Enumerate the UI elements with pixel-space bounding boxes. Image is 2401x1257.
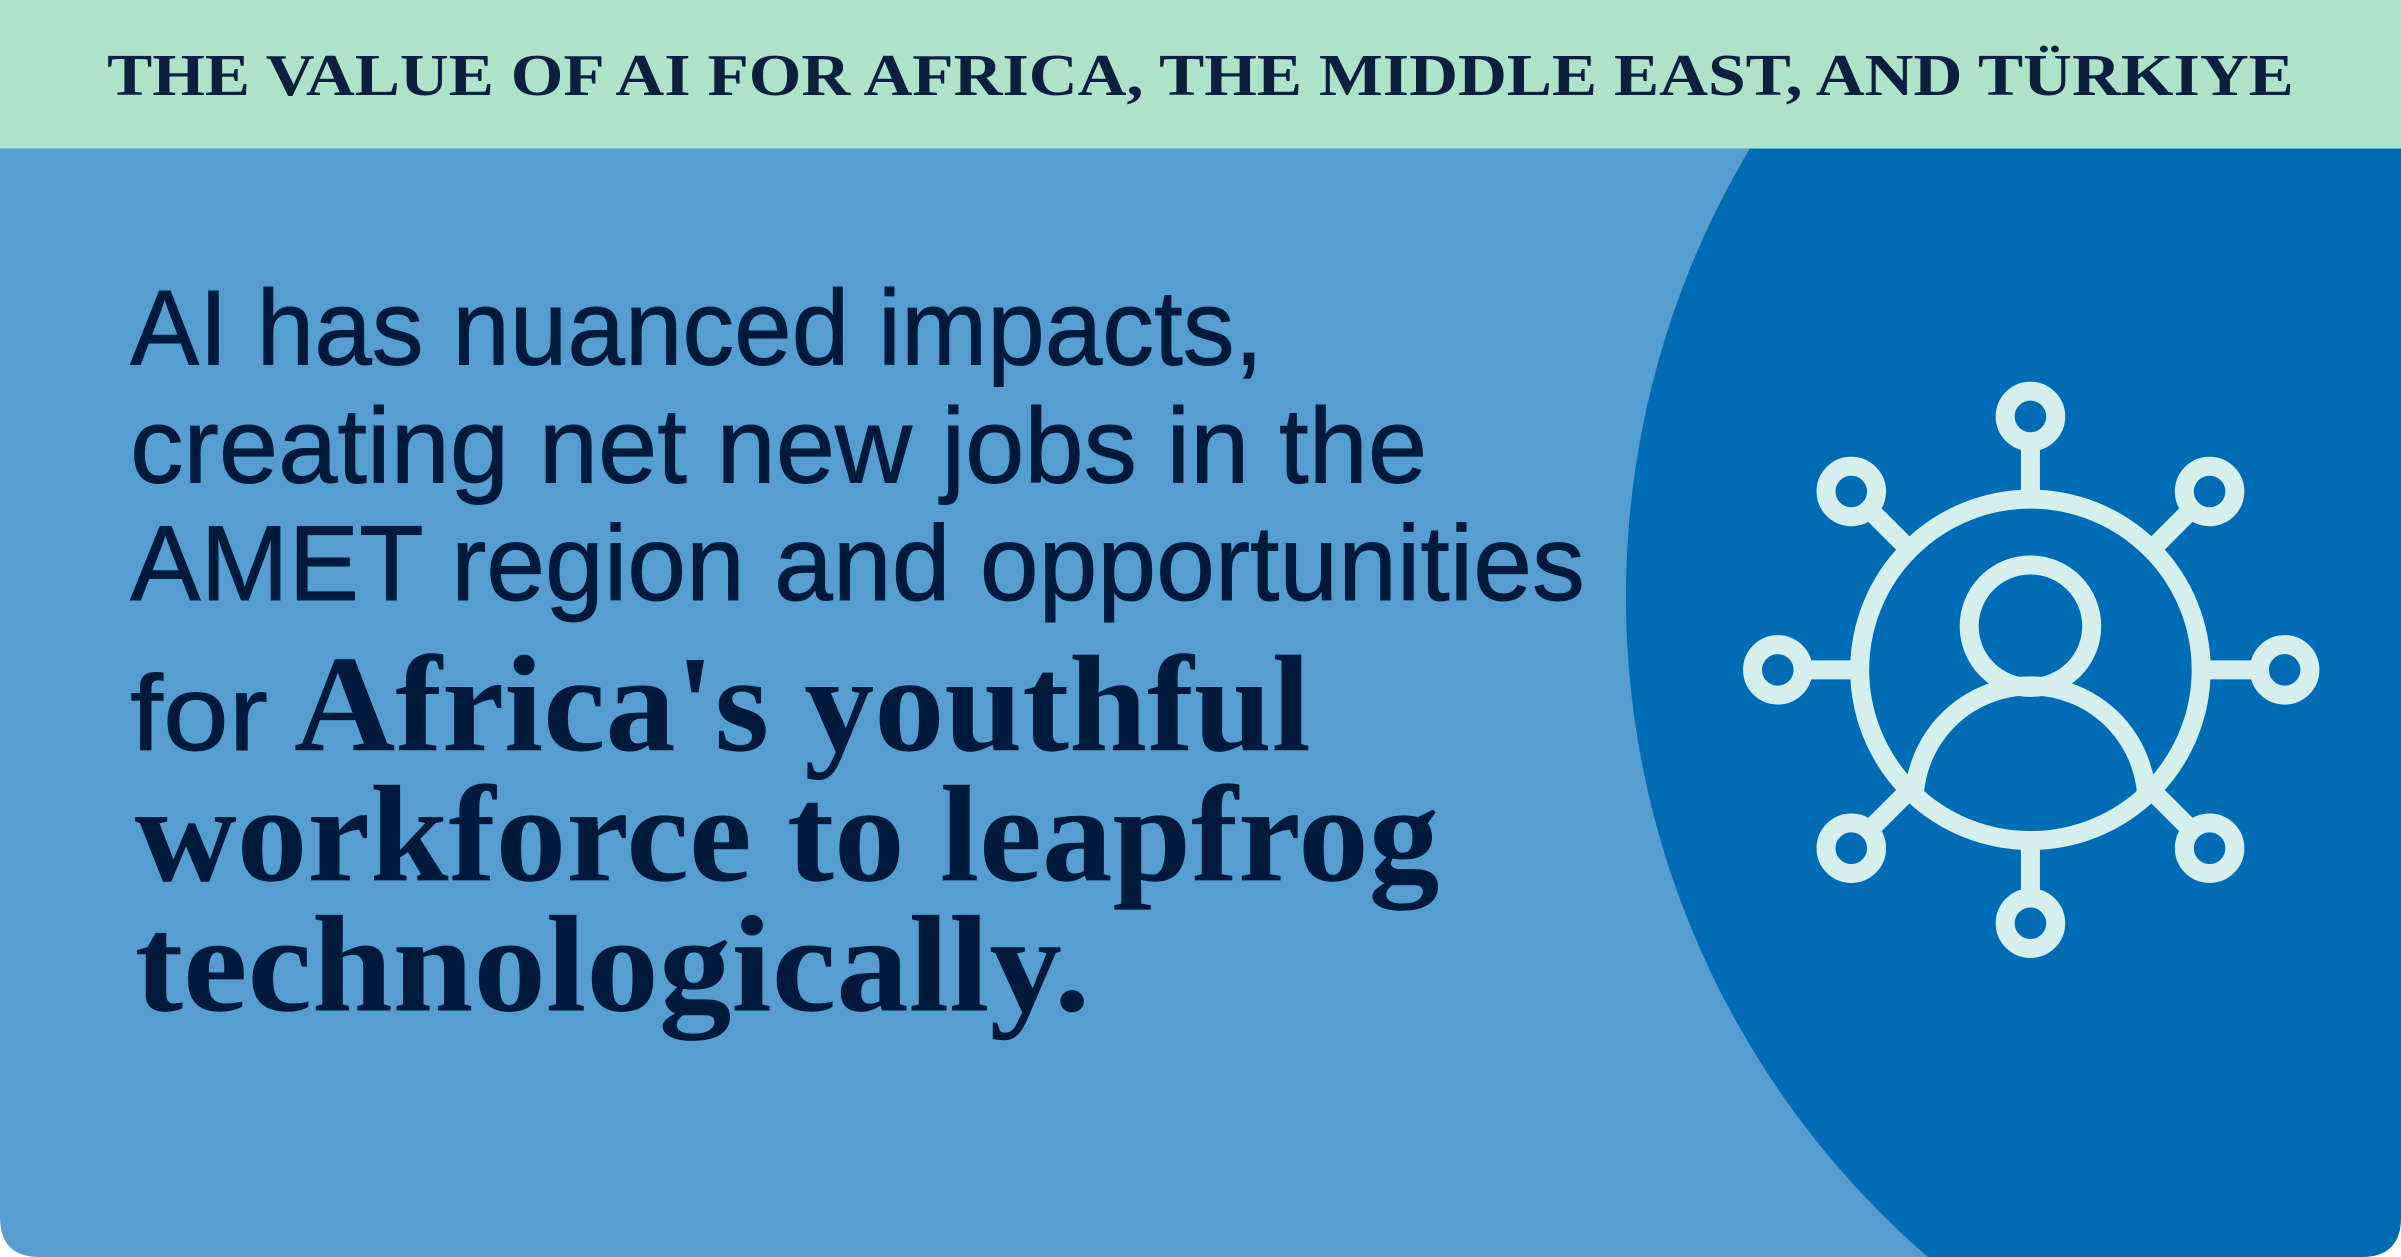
- headline text block: [130, 267, 1585, 1040]
- headline text block: AMET region and opportunities: [130, 503, 1585, 623]
- icon: person network: [1753, 391, 2310, 948]
- headline text block: technologically.: [135, 888, 1090, 1040]
- headline text block: workforce to leapfrog: [135, 757, 1439, 910]
- title: THE VALUE OF AI FOR AFRICA, THE MIDDLE EAST, AND TÜRKIYE: [107, 42, 2294, 108]
- headline text block: for: [130, 653, 268, 773]
- headline text block: Africa's youthful: [294, 627, 1311, 780]
- headline text block: creating net new jobs in the: [130, 385, 1427, 505]
- dark blue circle: [1626, 148, 2401, 1257]
- headline text block: AI has nuanced impacts,: [130, 267, 1263, 387]
